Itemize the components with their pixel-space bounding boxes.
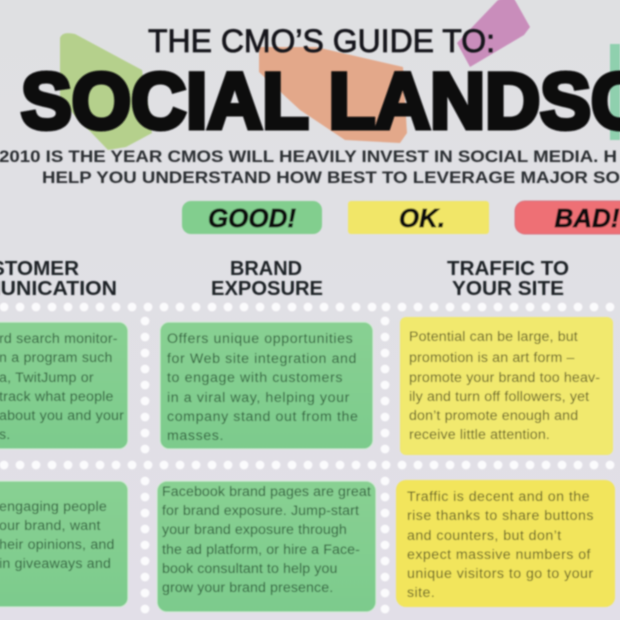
text block: expect massive numbers of: [407, 547, 591, 563]
text block: rd search monitor-: [0, 331, 118, 347]
legend: good: [182, 201, 322, 234]
shape: orange polygon: [259, 47, 407, 143]
text block: promotion is an art form –: [409, 350, 575, 366]
text block: to engage with customers: [167, 370, 343, 386]
legend: [182, 201, 620, 234]
text block: track what people: [0, 389, 114, 405]
shape: green triangle: [60, 33, 152, 150]
text block: Traffic is decent and on the: [407, 489, 590, 505]
text block: your brand exposure through: [162, 522, 347, 538]
panel: traffic row 2: [396, 480, 615, 607]
dotted grid: [0, 303, 614, 613]
text block: company stand out from the: [167, 409, 358, 425]
text block: about you and your: [0, 408, 124, 424]
text block: grow your brand presence.: [162, 580, 333, 596]
text block: a, TwitJump or: [0, 370, 94, 386]
text block: don’t promote enough and: [409, 408, 578, 424]
text block: and counters, but don’t: [407, 528, 562, 544]
heading: exposure: EXPOSURE: [211, 278, 323, 300]
text block: receive little attention.: [409, 427, 550, 443]
background shapes: [60, 0, 620, 150]
text block: book consultant to help you: [162, 561, 337, 577]
text block: ily and turn off followers, yet: [409, 389, 589, 405]
text block: Facebook brand pages are great: [162, 484, 371, 500]
heading: your site: YOUR SITE: [452, 278, 564, 300]
column headings: [0, 258, 569, 300]
panel: brand exposure row 1: [160, 322, 373, 449]
intro text: [0, 147, 620, 187]
title: guide line: THE CMO’S GUIDE TO:: [148, 23, 495, 59]
text block: heir opinions, and: [0, 537, 115, 553]
panel: brand exposure row 2: [157, 481, 376, 612]
panel: customer communication row 2: [0, 481, 128, 607]
intro line 2: HELP YOU UNDERSTAND HOW BEST TO LEVERAGE MAJOR SO: [42, 168, 620, 187]
text block: masses.: [167, 428, 224, 444]
legend: ok: OK.: [399, 203, 445, 233]
text block: n a program such: [0, 350, 113, 366]
heading: traffic to: TRAFFIC TO: [447, 258, 569, 280]
text block: Offers unique opportunities: [167, 331, 353, 347]
text block: for Web site integration and: [167, 351, 357, 367]
text block: in giveaways and: [0, 556, 111, 572]
shape: teal polygon: [610, 44, 620, 140]
text block: unique visitors to go to your: [407, 566, 594, 582]
legend: good: GOOD!: [208, 203, 296, 233]
shape: purple rectangle: [457, 0, 530, 67]
text block: engaging people: [0, 499, 107, 515]
heading: brand: BRAND: [230, 258, 302, 280]
text block: rise thanks to share buttons: [407, 508, 594, 524]
intro line 1: 2010 IS THE YEAR CMOS WILL HEAVILY INVEST IN SOCIAL MEDIA. H: [0, 147, 617, 166]
text block: Potential can be large, but: [409, 329, 578, 345]
panel: traffic row 1: [400, 317, 613, 455]
text block: the ad platform, or hire a Face-: [162, 542, 360, 558]
text block: site.: [407, 585, 435, 601]
legend: bad: [515, 201, 620, 234]
text block: in a viral way, helping your: [167, 390, 350, 406]
panel: customer communication row 1: [0, 322, 128, 449]
legend: ok: [348, 201, 489, 234]
text block: promote your brand too heav-: [409, 370, 600, 386]
legend: bad: BAD!: [554, 203, 620, 233]
title: [21, 23, 620, 145]
text block: for brand exposure. Jump-start: [162, 503, 359, 519]
text block: our brand, want: [0, 518, 101, 534]
